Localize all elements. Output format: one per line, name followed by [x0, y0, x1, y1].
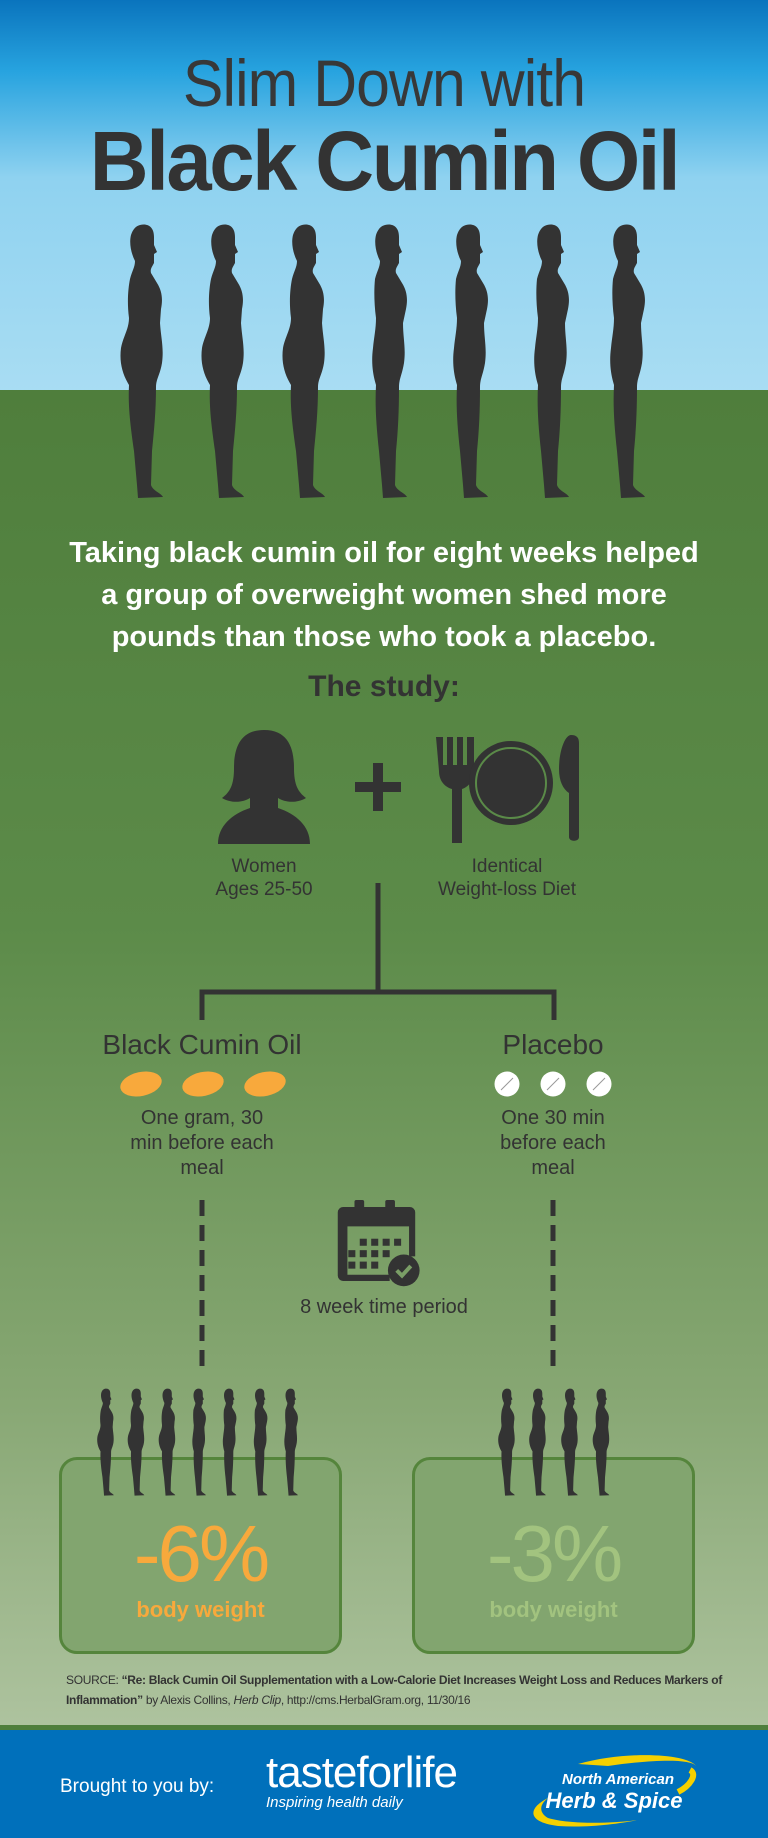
label: diet [438, 856, 576, 900]
intro text: pounds than those who took a placebo. [112, 621, 656, 653]
result right: -3% [487, 1509, 620, 1598]
box left [59, 1457, 342, 1654]
intro text [69, 537, 699, 653]
heading: Placebo [502, 1029, 604, 1060]
source: Inflammation” by Alexis Collins, Herb Clip, http://cms.HerbalGram.org, 11/30/16 [66, 1693, 470, 1707]
intro text: a group of overweight women shed more [101, 579, 667, 611]
label: diet: Weight-loss Diet [438, 879, 576, 900]
result right: body weight [489, 1597, 618, 1622]
logo: tasteforlife: tasteforlife [266, 1748, 457, 1797]
brought to you by: Brought to you by: [60, 1776, 214, 1797]
label: women: Women [231, 856, 297, 877]
dashed lines [200, 1200, 556, 1366]
logo: herb & spice: Herb & Spice [546, 1788, 682, 1813]
icon: fork plate knife [436, 735, 579, 843]
label: women [215, 856, 313, 900]
box right [412, 1457, 695, 1654]
group: placebo [494, 1029, 612, 1179]
logo: tasteforlife: Inspiring health daily [266, 1794, 403, 1811]
footer [0, 1725, 768, 1838]
group: black cumin oil [102, 1029, 302, 1179]
title: Black Cumin Oil [90, 114, 678, 208]
heading: Black Cumin Oil [102, 1029, 302, 1060]
tree connector [200, 883, 556, 1020]
source: SOURCE: “Re: Black Cumin Oil Supplementation with a Low-Calorie Diet Increases Weight Loss and Reduces Markers of [66, 1673, 722, 1687]
text: One 30 min [501, 1107, 605, 1129]
text: meal [180, 1157, 224, 1179]
result left: -6% [134, 1509, 267, 1598]
white pills [494, 1072, 612, 1096]
logo: herb & spice [533, 1755, 696, 1826]
title: Slim Down with [183, 46, 585, 120]
orange pills [120, 1072, 286, 1096]
text: One gram, 30 [141, 1107, 263, 1129]
silhouettes row [120, 224, 645, 498]
icon: calendar [338, 1200, 420, 1286]
title [90, 46, 678, 208]
text: min before each [130, 1132, 274, 1154]
text: meal [531, 1157, 575, 1179]
label: 8 week: 8 week time period [300, 1296, 468, 1318]
the study heading: The study: [308, 670, 460, 703]
label: women: Ages 25-50 [215, 879, 313, 900]
logo: herb & spice: North American [562, 1771, 674, 1788]
intro text: Taking black cumin oil for eight weeks helped [69, 537, 699, 569]
label: diet: Identical [472, 856, 542, 877]
text [500, 1107, 606, 1179]
small silhouettes right [498, 1388, 610, 1496]
icon: plus [355, 763, 401, 811]
text [130, 1107, 274, 1179]
icon: woman [218, 730, 310, 844]
result left: body weight [136, 1597, 265, 1622]
source [66, 1673, 722, 1707]
small silhouettes left [97, 1388, 298, 1496]
text: before each [500, 1132, 606, 1154]
